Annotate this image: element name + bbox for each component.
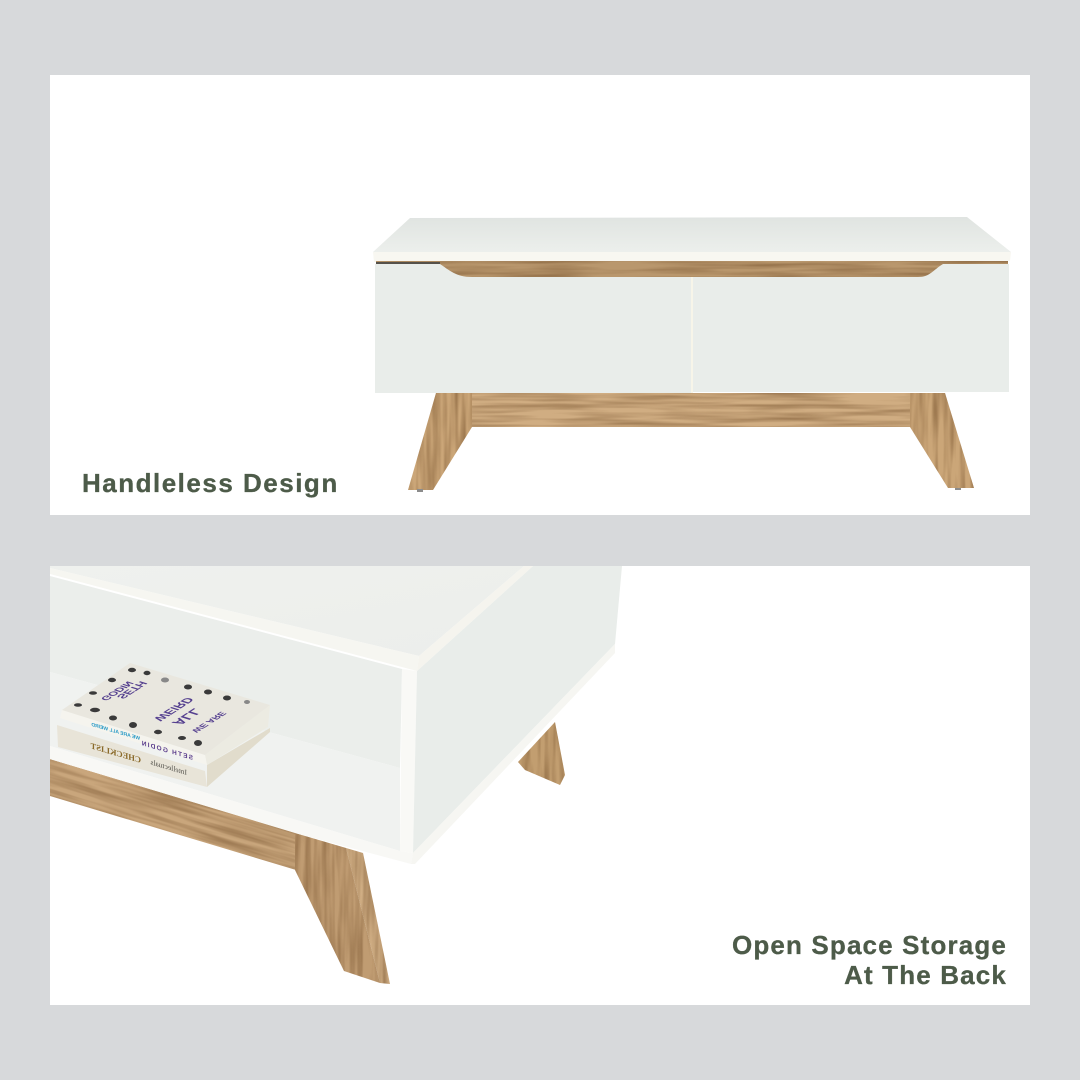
- wood recess behind drawers: [376, 261, 1008, 279]
- left wooden leg: [408, 393, 472, 492]
- lower book: [57, 725, 270, 787]
- top front edge: [373, 252, 1011, 262]
- heading: handleless design: Handleless Design: [82, 468, 339, 498]
- lower book: CHECKLIST: [90, 740, 141, 765]
- books stack: [57, 663, 270, 787]
- upper book: WE ARE ALL WEIRD: [91, 722, 140, 742]
- side panel: [413, 566, 622, 853]
- illustration: white cabinet with wooden legs: [373, 217, 1011, 492]
- illustration: cabinet back with open shelf and books: [50, 566, 622, 984]
- drawer divider: [691, 277, 693, 393]
- shelf floor: [50, 672, 400, 851]
- heading: open space storage at the back: [732, 930, 1007, 990]
- upper book: GODIN: [97, 680, 135, 701]
- cabinet back wall of shelf: [50, 576, 402, 768]
- cabinet top surface: [373, 217, 1011, 252]
- upper book: ALL: [168, 707, 207, 727]
- front wooden leg side: [346, 848, 390, 984]
- right drawer: [693, 264, 1009, 392]
- dark gap under top: [376, 262, 440, 264]
- upper book: [60, 663, 270, 765]
- wooden rail: [50, 759, 296, 870]
- top surface: [50, 566, 524, 656]
- top side edge band: [417, 566, 533, 671]
- front post: [400, 669, 417, 853]
- upper book: WEIRD: [150, 696, 198, 722]
- right wooden leg: [910, 393, 974, 490]
- heading: open space storage at the back: At The Back: [844, 960, 1007, 990]
- top front edge band: [50, 568, 419, 671]
- panel: handleless design: [50, 75, 1030, 515]
- front wooden leg face: [295, 833, 380, 983]
- upper book: SETH GODIN: [141, 740, 193, 762]
- heading: open space storage at the back: Open Space Storage: [732, 930, 1007, 960]
- shelf front band: [50, 746, 413, 864]
- upper book: WE ARE: [189, 711, 229, 733]
- upper book: SETH: [113, 680, 149, 700]
- panel: open space storage: [50, 566, 1030, 1005]
- side lower edge: [411, 644, 615, 864]
- back wooden leg: [518, 722, 565, 785]
- left drawer: [375, 264, 691, 393]
- wooden rail: [472, 393, 910, 427]
- lower book: Intellectuals: [150, 758, 187, 777]
